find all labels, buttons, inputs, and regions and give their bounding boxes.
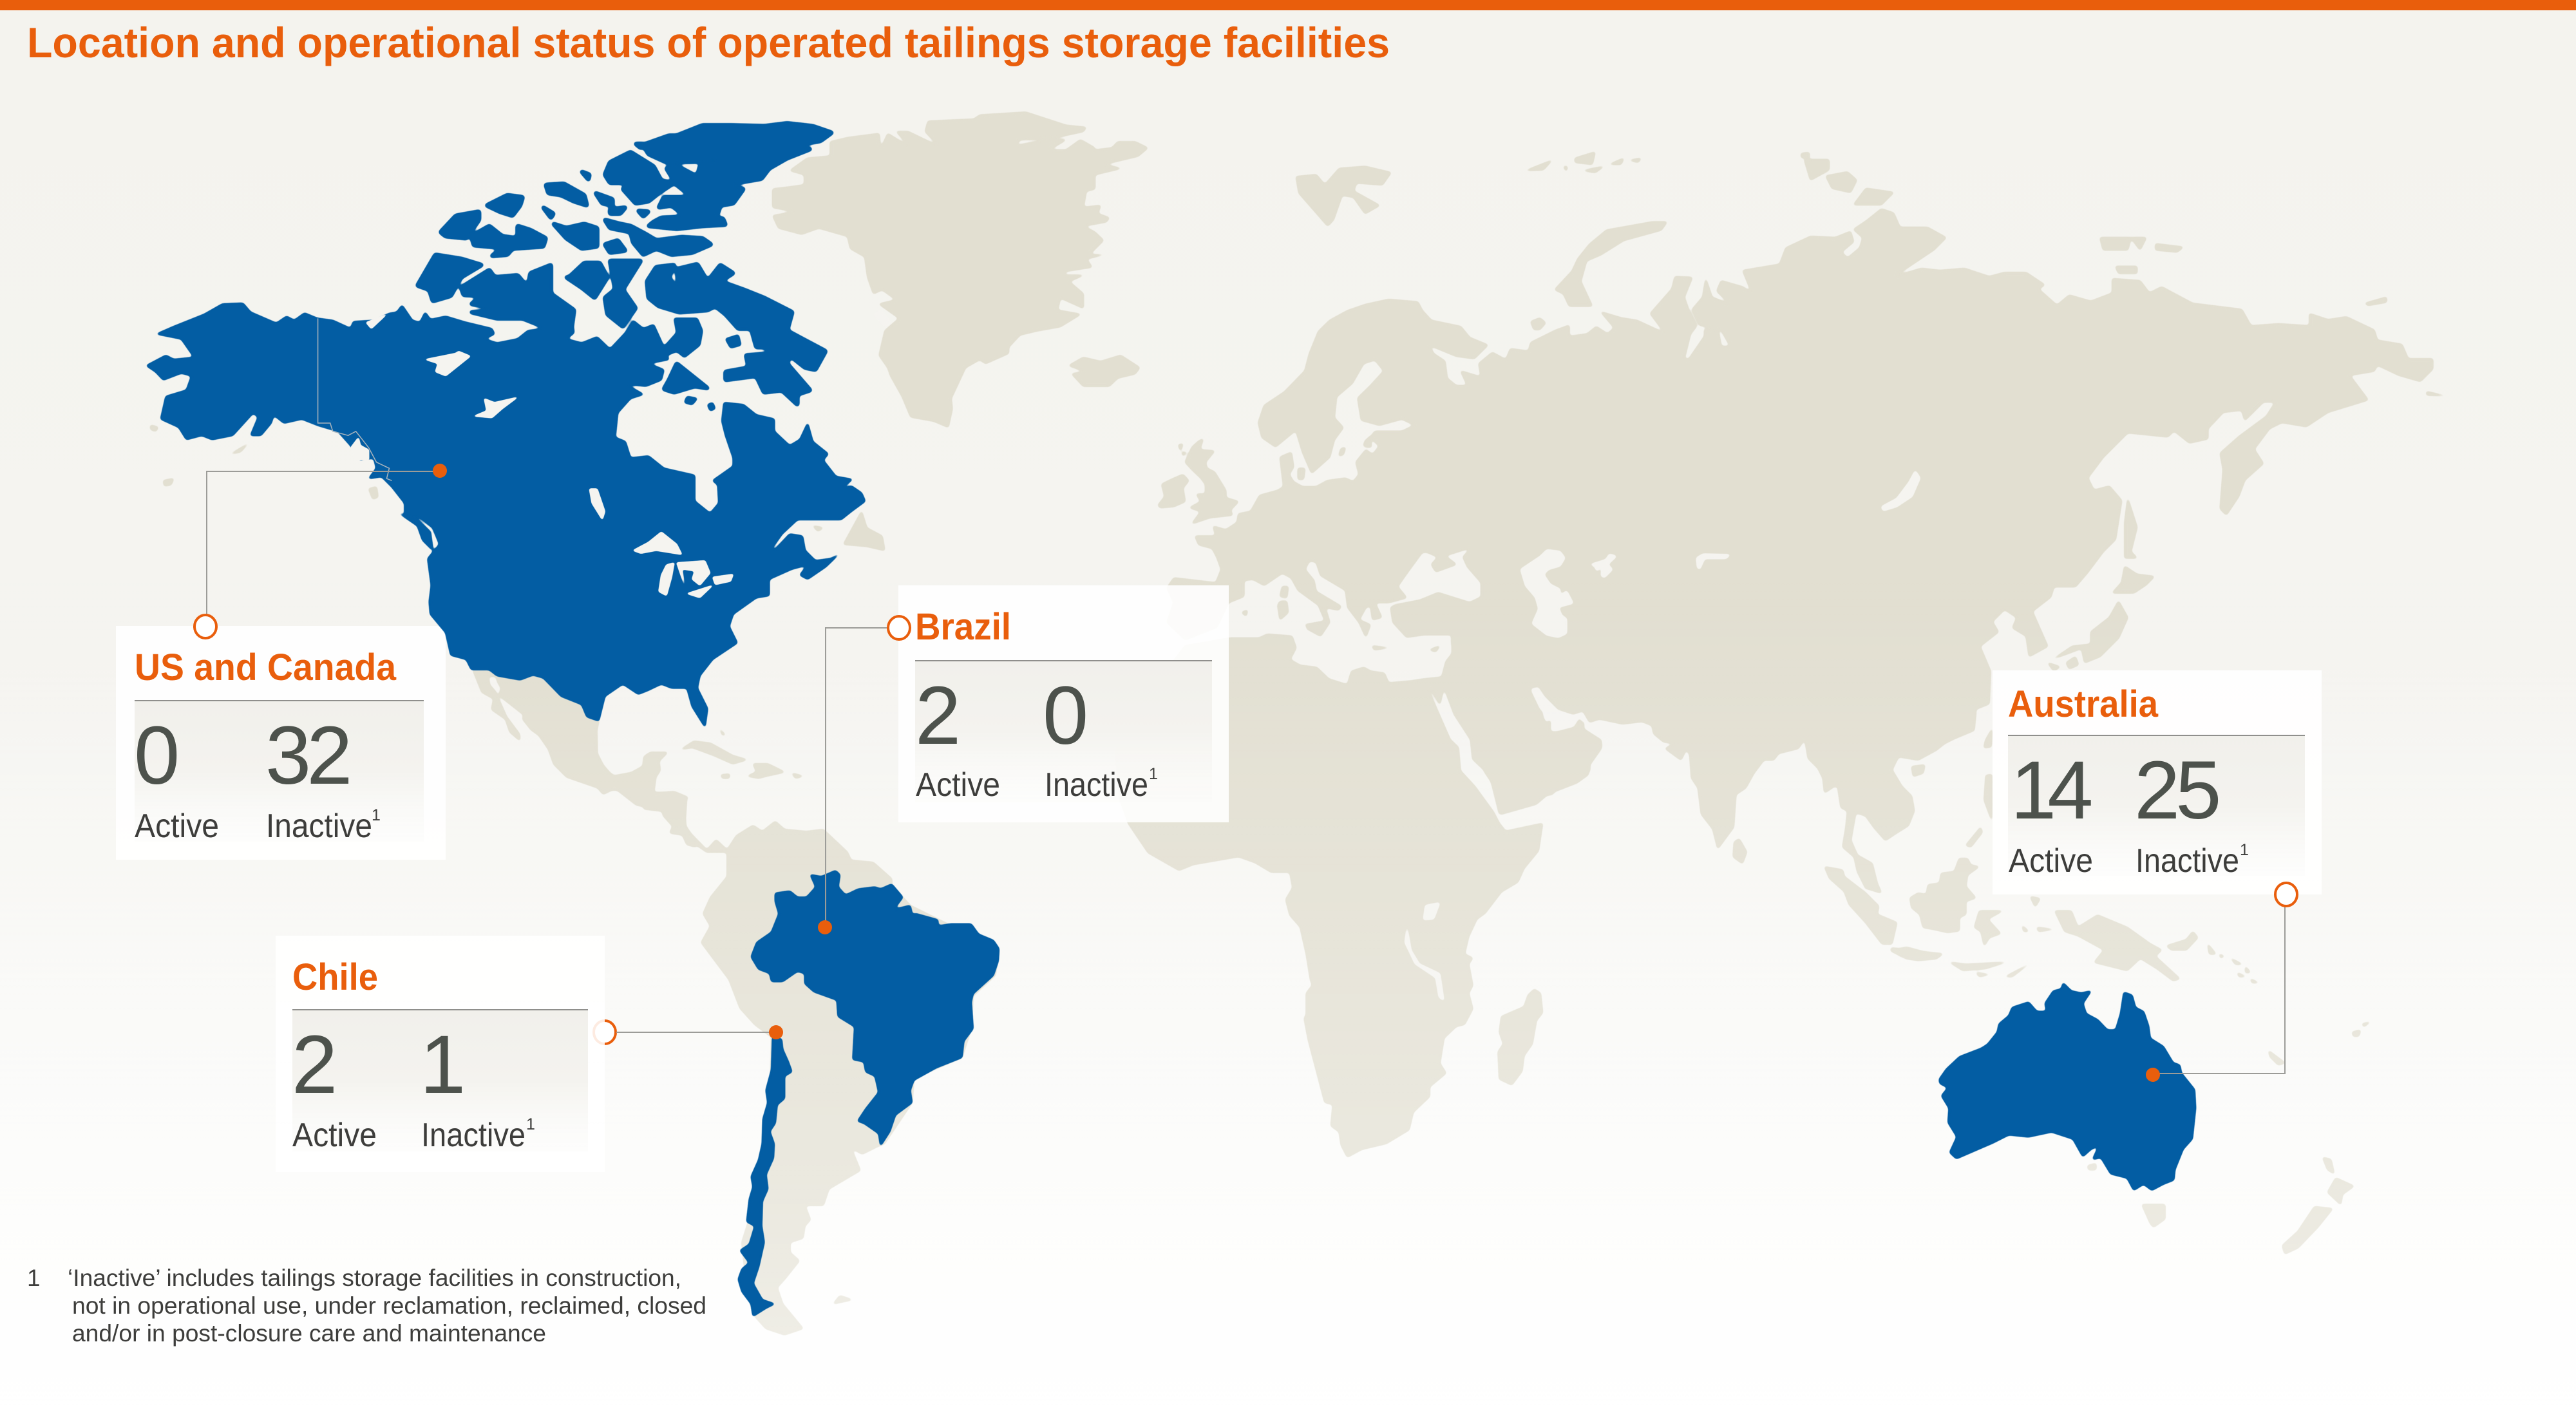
panel: US and Canada: [116, 626, 446, 860]
panel: Brazil: Inactive: [1045, 766, 1148, 804]
panel: Australia: 14: [2011, 744, 2091, 837]
panel: Chile: Inactive: [421, 1117, 526, 1154]
map: Australia: [1939, 983, 2195, 1190]
land: north Atlantic and Alaskan islands: [151, 425, 885, 551]
map: Chile: [738, 1037, 792, 1316]
panel: Australia: [1993, 670, 2322, 894]
panel: Chile: 1: [526, 1115, 535, 1133]
panel: Brazil: 1: [1149, 765, 1158, 783]
world map land: [151, 112, 2445, 1335]
panel: US and Canada: 1: [372, 806, 381, 824]
land: Africa and Arabia: [1115, 619, 1602, 1157]
panel: Chile: [276, 936, 605, 1172]
footnote: ‘Inactive’ includes tailings storage facilities in construction,: [68, 1265, 681, 1291]
leader: Chile: [616, 1025, 783, 1039]
lake: Baikal: [1881, 471, 1920, 511]
map: Brazil: [751, 871, 999, 1146]
footnote: not in operational use, under reclamation, reclaimed, closed: [72, 1292, 706, 1319]
land: south Asia: [1481, 515, 1992, 960]
lakes within Canada and the US: [351, 314, 734, 598]
leader: US and Canada: [194, 464, 447, 638]
panel: Australia: 25: [2134, 744, 2218, 837]
panel: Chile: 1: [420, 1019, 462, 1111]
panel: US and Canada: US and Canada: [135, 647, 397, 688]
leader: Brazil: [818, 616, 910, 934]
footnote: [27, 1265, 706, 1347]
land: Mexico and Central America: [473, 668, 696, 847]
land: Siberia and east Asia: [1651, 153, 2445, 730]
highlighted countries: [146, 123, 2195, 1316]
panel: Chile: Active: [292, 1117, 377, 1154]
panel: Brazil: 2: [915, 670, 957, 762]
Alaska-Canada border line: [318, 318, 392, 480]
panel: Brazil: 0: [1043, 670, 1086, 762]
map: US and Canada: [146, 123, 865, 727]
panel: Brazil: Brazil: [915, 606, 1011, 648]
panel: US and Canada: 0: [134, 710, 177, 802]
panel: Brazil: [898, 585, 1229, 822]
panel: US and Canada: 32: [265, 710, 348, 802]
panel: Australia: Active: [2009, 842, 2093, 880]
land: South America and Caribbean: [644, 729, 999, 1335]
panel: Australia: Australia: [2008, 683, 2159, 725]
panel: US and Canada: Active: [135, 808, 219, 845]
lakes: Victoria and Tanganyika: [1405, 903, 1444, 1001]
lakes: Caspian, Aral, Balkhash: [1520, 550, 1730, 638]
footnote: and/or in post-closure care and maintenance: [72, 1320, 546, 1347]
panel: Australia: Inactive: [2136, 842, 2239, 880]
footnote: 1: [27, 1265, 41, 1291]
land: Oceania islands: [1891, 775, 2371, 1254]
leader: Australia: [2146, 883, 2297, 1082]
inland seas and lakes on grey land: [873, 310, 1920, 1001]
panel: Brazil: Active: [916, 766, 1000, 804]
Chile callout ring (behind panel): [594, 1021, 616, 1044]
top orange bar: [0, 0, 2576, 10]
panel: Australia: 1: [2240, 841, 2249, 859]
panel: Chile: Chile: [292, 956, 378, 998]
land: Greenland and Arctic islands: [773, 112, 1667, 427]
Disko bay gap in Greenland: [873, 310, 891, 326]
panel: US and Canada: Inactive: [266, 808, 372, 845]
panel: Chile: 2: [292, 1019, 334, 1111]
land: Europe and western Russia: [1158, 299, 1803, 644]
title: Location and operational status of operated tailings storage facilities: [27, 19, 1390, 66]
